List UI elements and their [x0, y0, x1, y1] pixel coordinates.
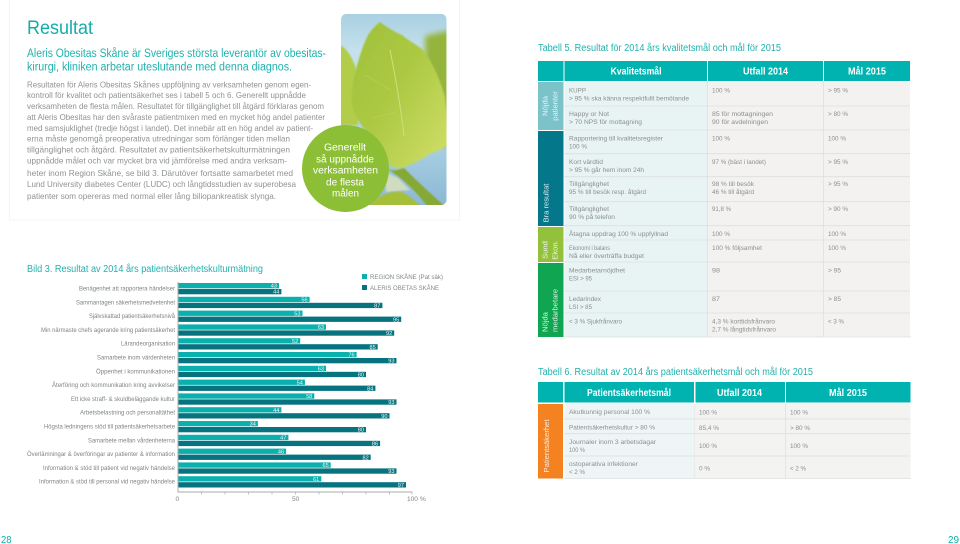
table 6 column: outcome 2014	[699, 410, 719, 472]
chart bar values: 95	[393, 317, 399, 323]
chart row labels: Överlämningar & överföringar av patienter & information	[27, 450, 175, 458]
table 6 column: goals: ostoperativa infektioner	[569, 461, 639, 468]
callout: green circle: målen	[332, 188, 359, 200]
group: Nöjda medarbetare	[538, 263, 564, 337]
body text: uppnådde målet och var mycket bra vid jämförelse med andra verksam-	[27, 156, 287, 166]
chart row labels: Min närmaste chefs agerande kring patientsäkerhet	[41, 327, 175, 334]
table 5 column: target 2015: > 95 %	[828, 88, 848, 94]
chart row labels: Självskattad patientsäkerhetsnivå	[89, 312, 175, 320]
group: Patientsäkerhet	[538, 404, 563, 478]
photo: green leaf	[336, 14, 450, 207]
chart row labels: Ett icke straff- & skuldbeläggande kultur	[71, 396, 176, 403]
table 5 column: outcome 2014: 46 % till åtgärd	[712, 188, 754, 196]
chart bar values: 61	[313, 477, 319, 483]
chart bar values: 56	[301, 298, 308, 304]
legend: REGION SKÅNE (Pat säk)	[370, 272, 443, 281]
chart axis: %	[420, 496, 426, 503]
chart bar values: 93	[388, 469, 394, 475]
callout: green circle: så uppnådde	[316, 154, 374, 166]
legend: ALERIS OBETAS SKÅNE	[370, 283, 440, 292]
chart bar values: 54	[297, 380, 303, 386]
chart axis: 0	[176, 496, 180, 503]
table 5 column: goals: KUPP	[569, 88, 586, 94]
subheading: kirurgi, kliniken arbetar uteslutande med denna diagnos.	[27, 62, 292, 74]
group: Bra resultat	[538, 131, 564, 226]
chart bar values: 44	[273, 290, 279, 296]
table 5 column: target 2015: > 95	[828, 268, 841, 274]
table 6 header: Mål 2015	[829, 387, 867, 399]
table 6 body background	[564, 404, 911, 478]
chart row labels: Information & stöd till personal vid negativ händelse	[39, 479, 175, 486]
chart bar values: 43	[271, 284, 277, 290]
chart row labels: Arbetsbelastning och personaltäthet	[80, 410, 175, 417]
table 5	[538, 61, 911, 337]
chart bar values: 76	[348, 353, 355, 359]
chart bar values: 34	[250, 422, 256, 428]
table 5 column: goals: Ledarindex	[569, 296, 602, 303]
legend	[362, 272, 443, 292]
chart bar values: 63	[318, 325, 324, 331]
table 5 column: goals: Happy or Not	[569, 111, 609, 118]
chart row labels: Lärandeorganisation	[121, 341, 175, 348]
callout: green circle: de flesta	[326, 178, 364, 188]
table 5 column: outcome 2014: 91,8 %	[712, 206, 731, 213]
table 5 column: goals: ESI > 95	[569, 276, 592, 282]
table 5 column: target 2015: > 85	[828, 296, 841, 303]
table 5 body background	[564, 82, 911, 337]
body text: Lund University diabetes Center (LUDC) och långtidsstudien av superobesa	[27, 179, 296, 189]
table 5 column: outcome 2014: 2,7 % långtidsfrånvaro	[712, 326, 776, 334]
chart title: Bild 3. Resultat av 2014 års patientsäkerhetskulturmätning	[27, 263, 263, 275]
callout: green circle	[302, 125, 389, 212]
body text: patienter som opereras med normal eller lång biliopankreatisk slynga.	[27, 191, 276, 201]
table 5 column: outcome 2014: 98 % till besök	[712, 181, 755, 188]
table 5 column: goals: Tillgänglighet	[569, 181, 609, 188]
chart bar values: 86	[372, 442, 378, 448]
table 5 column: target 2015: > 80 %	[828, 111, 848, 118]
chart axis	[176, 282, 426, 503]
chart axis: 50	[292, 496, 300, 503]
table 5 column: goals: > 70 NPS för mottagning	[569, 119, 642, 126]
chart bar values	[250, 284, 404, 489]
table 5 column: outcome 2014: 85 för mottagningen	[712, 111, 773, 118]
group: Sund Ekon: Sund	[540, 241, 550, 259]
subheading	[27, 48, 326, 74]
table 6 column: outcome 2014: 85,4 %	[699, 425, 719, 432]
body text: heter inom Region Skåne, se bild 3. Därutöver fortsatte samarbetet med	[27, 168, 293, 178]
chart bar values: 44	[273, 408, 279, 414]
table 5 column: target 2015: > 90 %	[828, 206, 848, 213]
group: Nöjda patienter: patienter	[550, 91, 560, 121]
table 5 column: outcome 2014	[712, 88, 776, 334]
body text: att Aleris Obesitas har den svåraste patientmixen med en mycket hög andel patienter	[27, 112, 325, 122]
table 6 column: outcome 2014: 0 %	[699, 466, 710, 472]
table 5 column: outcome 2014: 4,3 % korttidsfrånvaro	[712, 318, 775, 326]
chart bar values: 52	[292, 339, 298, 345]
chart row labels: Återföring och kommunikation kring avvikelser	[52, 380, 176, 389]
chart row labels: Högsta ledningens stöd till patientsäkerhetsarbete	[44, 424, 175, 430]
body text: kontroll för kvalitet och patientsäkerhet ses i tabell 5 och 6. Generellt uppnådde	[27, 90, 306, 100]
group: Nöjda patienter: Nöjda	[540, 95, 550, 116]
table 5 column: outcome 2014: 98	[712, 268, 720, 274]
chart bar values: 58	[306, 394, 312, 400]
table 6 column: goals: 100 %	[569, 447, 585, 454]
group: Sund Ekon	[538, 227, 564, 262]
chart bars: aleris	[178, 289, 406, 488]
bar chart	[27, 282, 426, 503]
chart bar values: 47	[280, 436, 286, 442]
chart row labels: Öppenhet i kommunikationen	[96, 367, 175, 375]
chart row labels: Samarbete inom värdenheten	[97, 354, 175, 362]
callout: green circle: Generellt	[324, 142, 366, 154]
table 5 column: target 2015: > 95 %	[828, 159, 848, 166]
table 6 column: target 2015: 100 %	[790, 410, 808, 416]
table 5 title: Tabell 5. Resultat för 2014 års kvalitetsmål och mål för 2015	[538, 42, 781, 54]
table 6 header: Utfall 2014	[717, 388, 762, 399]
chart bar values: 46	[278, 449, 284, 455]
title: Resultat	[27, 17, 94, 39]
table 5 column: outcome 2014: 87	[712, 296, 720, 303]
chart bar values: 85	[369, 345, 376, 351]
table 5 column: target 2015: 100 %	[828, 245, 846, 252]
table 5 column: goals: Nå eller överträffa budget	[569, 252, 644, 260]
chart bar values: 80	[358, 372, 364, 378]
group: Nöjda medarbetare: medarbetare	[550, 289, 560, 332]
table 5 column: goals	[569, 88, 689, 326]
table 5 column: outcome 2014: 100 %	[712, 136, 730, 142]
chart bar values: 82	[362, 455, 369, 461]
table 5 column: goals: Kort värdtid	[569, 159, 603, 166]
chart bar values: 80	[358, 428, 364, 434]
chart row labels: Benägenhet att rapportera händelser	[79, 286, 176, 292]
table 6 column: target 2015: 100 %	[790, 443, 808, 450]
table 5 column: goals: > 95 % ska känna respektfullt bemötande	[569, 96, 689, 102]
group: Sund Ekon: Ekon.	[550, 240, 560, 260]
table 6 column: goals: Patientsäkerhetskultur > 80 %	[569, 424, 655, 432]
table 5 column: outcome 2014: 97 % (bäst i landet)	[712, 159, 766, 166]
chart bar values: 84	[367, 386, 373, 392]
chart row labels: Information & stöd till patient vid negativ händelse	[43, 465, 175, 472]
table 6 column: target 2015: < 2 %	[790, 466, 806, 472]
chart bar values: 93	[388, 400, 394, 406]
group: Patientsäkerhet: Patientsäkerhet	[542, 419, 551, 472]
callout: green circle: verksamheten	[313, 166, 378, 177]
table 6 column: goals: Akutkunnig personal 100 %	[569, 409, 650, 416]
table 5 column: goals: 95 % till besök resp. åtgärd	[569, 188, 646, 196]
table 6 column: outcome 2014: 100 %	[699, 443, 717, 450]
table 5 column: goals: Ekonomi i balans	[569, 245, 610, 252]
table 6 header: Patientsäkerhetsmål	[587, 387, 671, 399]
table 5 column: outcome 2014: 100 %	[712, 88, 730, 94]
table 5 column: target 2015: > 95 %	[828, 181, 848, 188]
table 5 column: target 2015	[828, 88, 848, 326]
table 5 column: target 2015: 100 %	[828, 231, 846, 238]
body text: med samsjuklighet (tredje högst i landet). Det innebär att en hög andel av patient-	[27, 124, 313, 133]
body text: Resultaten för Aleris Obesitas Skånes uppföljning av verksamheten genom egen-	[27, 79, 311, 89]
body text	[27, 79, 325, 201]
body text: tillgänglighet och åtgärd. Resultatet av patientsäkerhetskulturmätningen	[27, 145, 290, 155]
table 5 column: outcome 2014: 100 %	[712, 231, 730, 238]
chart bar values: 63	[318, 366, 324, 372]
chart bar values: 93	[388, 359, 394, 365]
chart bars: region	[178, 283, 357, 482]
chart bar values: 92	[386, 331, 392, 337]
table 5 column: outcome 2014: 90 för avdelningen	[712, 119, 768, 126]
table 6 header	[538, 382, 910, 402]
table 6 column: goals	[569, 409, 657, 476]
table 5 column: goals: 100 %	[569, 144, 587, 150]
body text: verksamheten de flesta målen. Resultatet för tillgänglighet till åtgärd förklaras genom	[27, 101, 324, 111]
table 5 header: Mål 2015	[848, 66, 886, 78]
table 5 header: Utfall 2014	[743, 66, 788, 78]
chart bar values: 65	[322, 463, 329, 469]
chart bar values: 87	[374, 304, 380, 310]
group: Nöjda patienter	[538, 82, 564, 130]
table 5 header	[538, 61, 910, 81]
table 5 column: target 2015: 100 %	[828, 136, 846, 142]
table 5 column: goals: Tillgänglighet	[569, 206, 609, 213]
table 5 column: target 2015: < 3 %	[828, 318, 844, 326]
table 5 column: goals: > 95 % går hem inom 24h	[569, 166, 644, 174]
chart bar values: 97	[398, 483, 404, 489]
group: Nöjda medarbetare: Nöjda	[540, 311, 550, 332]
table 5 column: goals: Åtagna uppdrag 100 % uppfyllnad	[569, 229, 668, 238]
table 6 column: outcome 2014: 100 %	[699, 410, 717, 416]
table 6	[538, 382, 911, 478]
chart row labels: Samarbete mellan vårdenheterna	[88, 436, 175, 444]
panel: intro frame	[10, 0, 460, 220]
table 6 column: goals: Journaler inom 3 arbetsdagar	[569, 439, 657, 446]
table 5 column: goals: LSI > 85	[569, 304, 592, 311]
table 5 header: Kvalitetsmål	[610, 66, 662, 78]
chart axis: 100	[407, 496, 418, 503]
table 6 column: target 2015: > 80 %	[790, 425, 810, 432]
subheading: Aleris Obesitas Skåne är Sveriges största leverantör av obesitas-	[27, 48, 326, 60]
table 5 column: goals: Medarbetarnöjdhet	[569, 268, 625, 274]
table 5 column: goals: Rapportering till kvalitetsregister	[569, 136, 664, 142]
table 6 column: goals: < 2 %	[569, 469, 585, 476]
table 5 column: goals: 90 % på telefon	[569, 213, 615, 221]
group: Bra resultat: Bra resultat	[542, 183, 550, 222]
table 5 column: outcome 2014: 100 % följsamhet	[712, 245, 762, 252]
body text: erna måste genomgå preoperativa utredningar som förlänger tiden mellan	[27, 134, 290, 144]
table 5 column: goals: < 3 % Sjukfrånvaro	[569, 318, 622, 326]
chart bar values: 53	[294, 311, 300, 317]
chart row labels: Sammantagen säkerhetsmedvetenhet	[76, 299, 175, 306]
chart row labels	[27, 286, 176, 486]
table 6 title: Tabell 6. Resultat av 2014 års patientsäkerhetsmål och mål för 2015	[538, 366, 813, 378]
chart bar values: 90	[381, 414, 388, 420]
table 6 column: target 2015	[790, 410, 810, 472]
